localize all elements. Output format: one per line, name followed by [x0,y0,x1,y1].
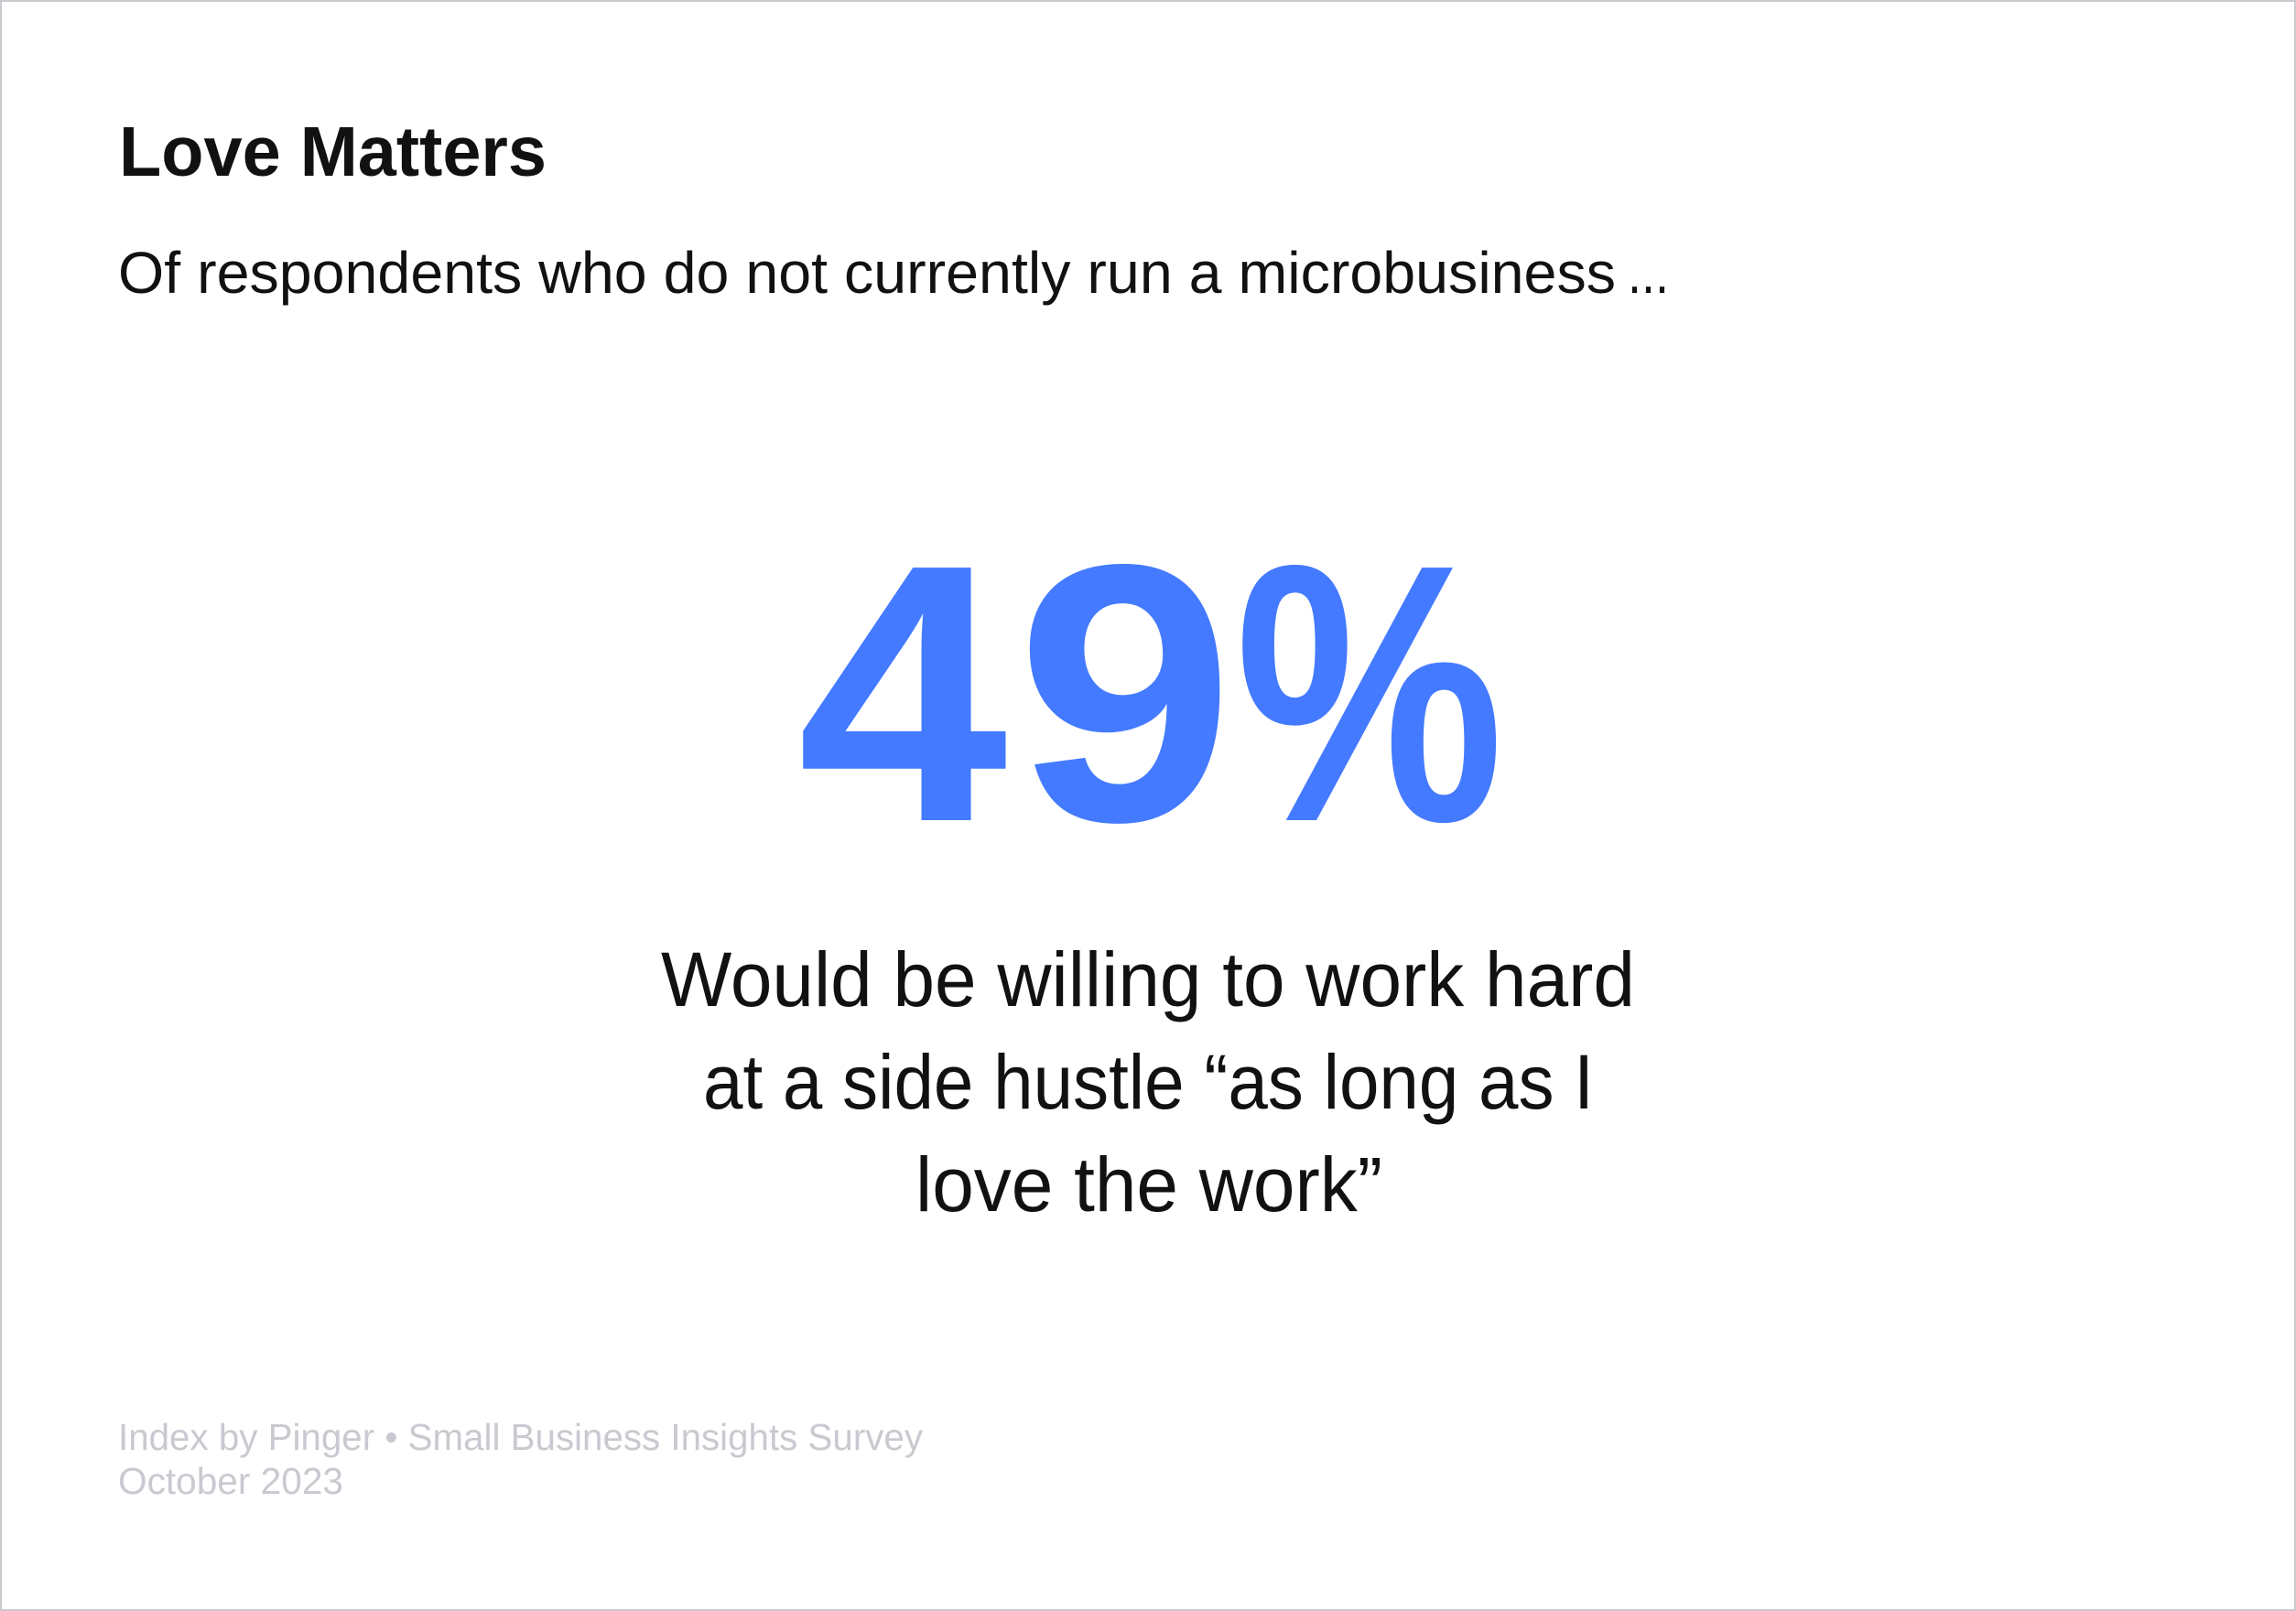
title: Love Matters [119,113,547,191]
statement line 3: love the work” [915,1141,1382,1227]
statement line 2: at a side hustle “as long as I [703,1039,1594,1125]
big statistic: % [1235,488,1504,898]
subtitle: Of respondents who do not currently run a microbusiness [118,240,1616,306]
source line: Index by Pinger • Small Business Insights Survey [118,1416,923,1458]
statement text [661,936,1635,1227]
big statistic [797,488,1504,899]
big statistic: 4 [797,489,1010,899]
subtitle: ... [1628,240,1669,306]
source note [118,1416,923,1502]
statement line 1: Would be willing to work hard [661,936,1635,1022]
date line: October 2023 [118,1460,343,1502]
big statistic: 9 [1016,488,1234,898]
